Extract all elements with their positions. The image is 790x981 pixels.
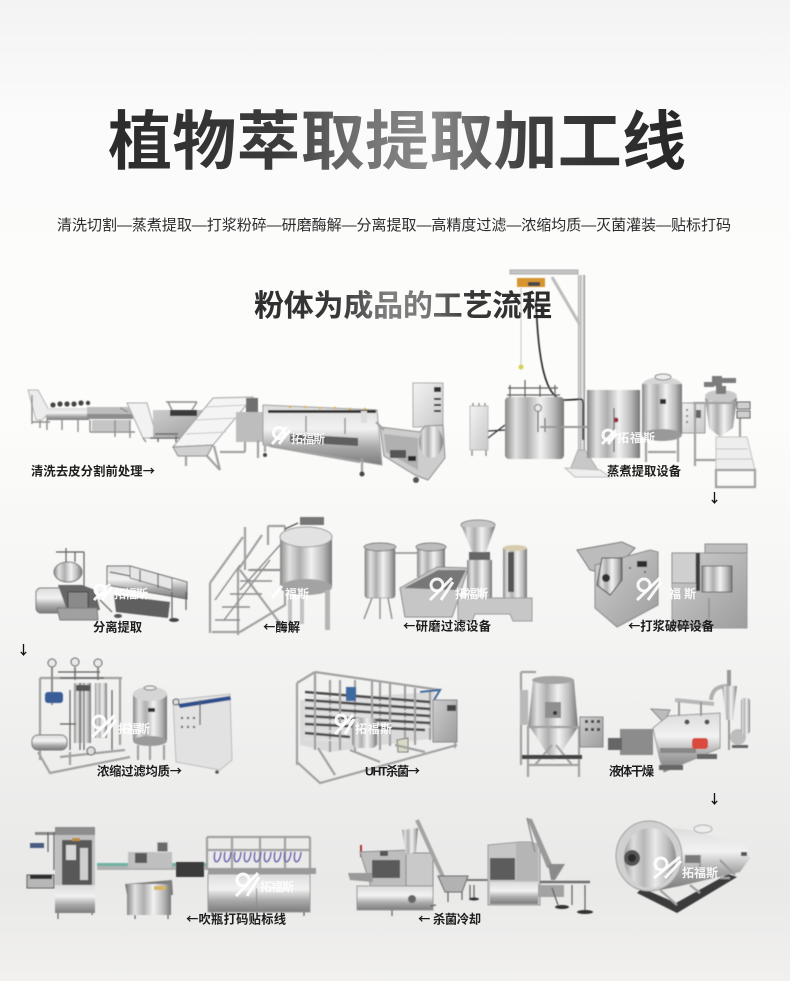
label: ←吹瓶打码贴标线 xyxy=(186,910,286,928)
equipment: membrane skid, tank and homogenizer xyxy=(32,658,232,774)
equipment: pouch packer, capper and conveyor xyxy=(348,818,593,916)
watermark logo xyxy=(602,430,655,445)
label: ←研磨过滤设备 xyxy=(403,616,492,634)
equipment: filters, trough and colloid mill xyxy=(364,520,532,621)
label: 蒸煮提取设备 xyxy=(607,464,682,478)
label: UHT杀菌→ xyxy=(365,762,420,780)
equipment: disc centrifuge and decanter xyxy=(36,548,187,622)
panel: grinding and filtering xyxy=(364,520,532,634)
label: 清洗去皮分割前处理→ xyxy=(31,462,155,480)
watermark logo xyxy=(335,715,392,736)
equipment: sleeve labeller, labeller and filler xyxy=(27,827,316,919)
watermark logo: 拓福斯 xyxy=(355,721,392,736)
watermark logo xyxy=(637,578,696,601)
equipment: platform stairs and tank xyxy=(210,517,332,635)
process steps text: 清洗切割—蒸煮提取—打浆粉碎—研磨酶解—分离提取—高精度过滤—浓缩均质—灭菌灌装—贴标打码 xyxy=(57,216,731,234)
panel: washing and peeling line xyxy=(28,383,445,483)
watermark logo: 拓福斯 xyxy=(260,879,294,894)
label: 液体干燥 xyxy=(609,764,655,778)
label: 浓缩过滤均质→ xyxy=(97,762,182,780)
watermark logo: 拓福斯 xyxy=(682,865,718,880)
arrow: down to freeze dryer: ↓ xyxy=(708,789,721,808)
panel: UHT sterilization xyxy=(297,672,457,783)
label: ←打浆破碎设备 xyxy=(628,616,715,634)
watermark logo xyxy=(236,873,294,896)
panel: steam extraction equipment xyxy=(470,270,755,487)
panel: concentration, filtration, homogenizing xyxy=(32,658,232,780)
panel: blow, code and labelling line xyxy=(27,827,316,928)
watermark logo: 拓福斯 xyxy=(455,586,488,601)
label: ←酶解 xyxy=(263,618,300,636)
watermark logo: 福斯 xyxy=(285,586,309,601)
watermark logo: 拓福斯 xyxy=(118,721,150,736)
watermark logo xyxy=(430,578,488,601)
equipment: spray dryer and fluid bed dryer xyxy=(520,670,750,777)
watermark logo xyxy=(92,715,150,737)
panel: liquid drying xyxy=(520,670,750,778)
panel: enzymolysis xyxy=(210,517,332,636)
equipment: crusher and pulper xyxy=(577,542,747,628)
label: ← 杀菌冷却 xyxy=(418,910,481,928)
panel: separation xyxy=(36,548,187,634)
section heading: 粉体为成品的工艺流程 xyxy=(254,290,552,323)
equipment: wash, peel and cut machines xyxy=(28,383,445,483)
panel: sterilise and cool (packing line) xyxy=(348,818,593,928)
equipment: horizontal freeze dryer xyxy=(616,821,750,913)
label: 分离提取 xyxy=(93,620,143,634)
watermark logo: 福斯 xyxy=(669,586,696,601)
equipment: tubular UHT steriliser xyxy=(297,672,457,783)
watermark logo xyxy=(94,584,148,601)
panel: freeze dryer xyxy=(616,821,750,913)
title: 植物萃取提取加工线 xyxy=(108,106,686,178)
arrow: down to concentrate row: ↓ xyxy=(17,640,30,659)
equipment: hoist, kettles, tanks, steps xyxy=(470,270,755,487)
panel: pulping and crushing xyxy=(577,542,747,634)
watermark logo: 拓福斯 xyxy=(114,586,148,601)
watermark logo: 拓福斯 xyxy=(291,431,325,446)
watermark logo xyxy=(272,427,325,446)
watermark logo: 拓福斯 xyxy=(617,430,655,445)
arrow: down to separation row: ↓ xyxy=(708,488,721,507)
